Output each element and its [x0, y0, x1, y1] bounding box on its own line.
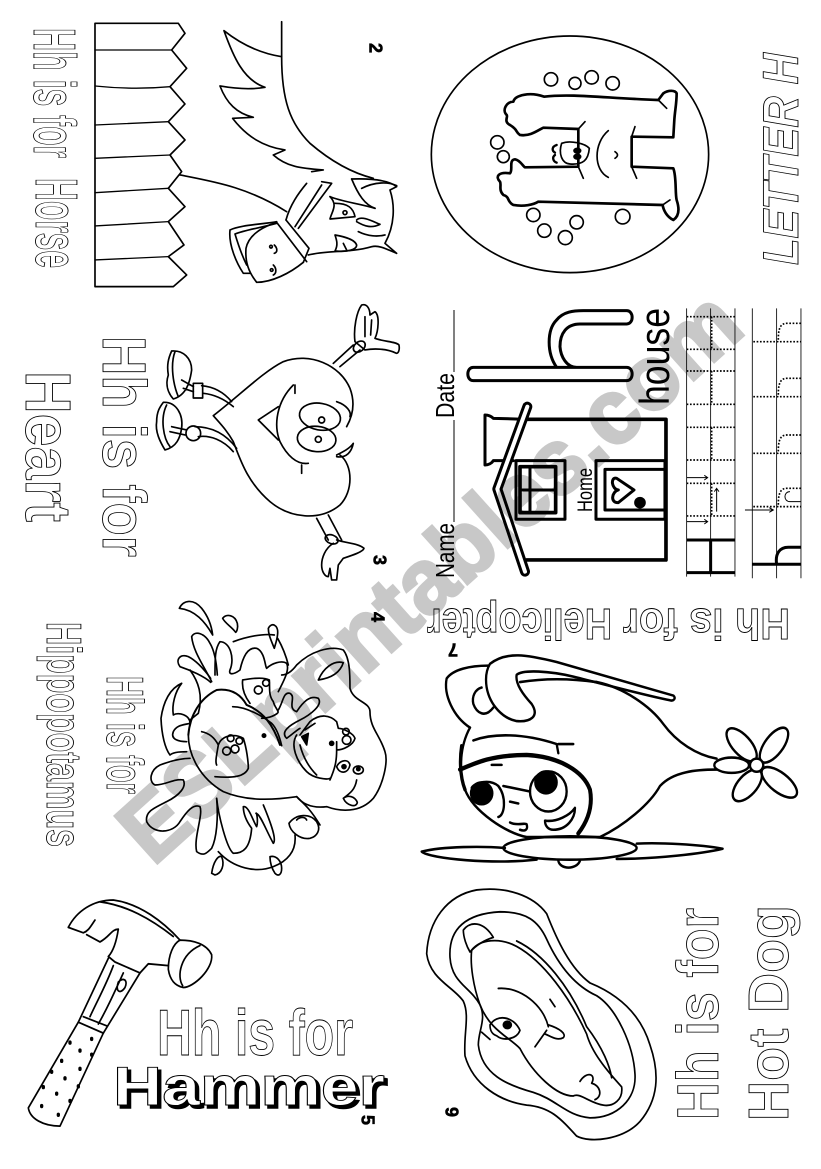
- helicopter title: Helicopter: [427, 599, 612, 648]
- name and date lines: [430, 310, 460, 578]
- word: house: house: [631, 308, 678, 405]
- circle with bubbles: [431, 36, 709, 273]
- helicopter title: Hh is for: [623, 599, 790, 648]
- page number 6: 6: [442, 1107, 462, 1117]
- big letter h: [468, 311, 632, 381]
- panel: horse page: [21, 22, 397, 287]
- panel: heart page: [12, 305, 399, 580]
- hot dog title: Hh is for: [666, 908, 731, 1120]
- heart title: Heart: [12, 371, 84, 522]
- hippopotamus title: Hh is for: [95, 676, 153, 794]
- hippo in water splash: [146, 601, 386, 875]
- fence: [95, 23, 187, 287]
- page number 3: 3: [370, 555, 390, 565]
- panel: handwriting page: [430, 308, 801, 578]
- panel: helicopter page: [422, 599, 801, 868]
- watermark: ESLprintables.com: [98, 271, 761, 882]
- house drawing: [485, 407, 666, 572]
- hammer title: [113, 996, 388, 1120]
- hammer drawing: [28, 900, 212, 1126]
- heart title: [12, 336, 158, 557]
- horse head: [230, 179, 397, 282]
- name and date lines: Name: [430, 523, 460, 578]
- panel: hot dog page: [427, 889, 801, 1140]
- page number 5: 5: [358, 1115, 378, 1125]
- hot dog drawing: [427, 889, 656, 1140]
- hammer title: Hh is for: [157, 996, 353, 1069]
- horse mane and neck: [180, 22, 373, 212]
- hot dog title: Hot Dog: [737, 905, 801, 1121]
- name and date lines: Date: [430, 373, 460, 418]
- H character: [498, 91, 678, 220]
- helicopter title: [427, 599, 790, 648]
- page number 7: 7: [448, 640, 458, 660]
- heart character: [156, 305, 399, 580]
- heart title: Hh is for: [90, 336, 158, 557]
- hippopotamus title: [36, 622, 153, 847]
- horse title: Horse: [23, 178, 89, 268]
- hot dog title: [666, 905, 801, 1121]
- panel: letter H cover: [431, 36, 809, 273]
- tracing rows: [687, 308, 801, 578]
- hammer title: Hammer: [113, 1055, 385, 1117]
- hippopotamus title: Hippopotamus: [36, 622, 90, 847]
- page number 2: 2: [366, 43, 386, 53]
- title: LETTER H: LETTER H: [753, 52, 809, 265]
- horse title: Hh is for: [21, 28, 87, 158]
- helicopter drawing: [422, 655, 801, 868]
- hammer title: Hammer: [116, 1058, 388, 1120]
- word: Home: Home: [574, 468, 597, 512]
- panel: hippopotamus page: [36, 601, 388, 875]
- panel: hammer page: [28, 900, 388, 1126]
- page number 4: 4: [368, 612, 388, 622]
